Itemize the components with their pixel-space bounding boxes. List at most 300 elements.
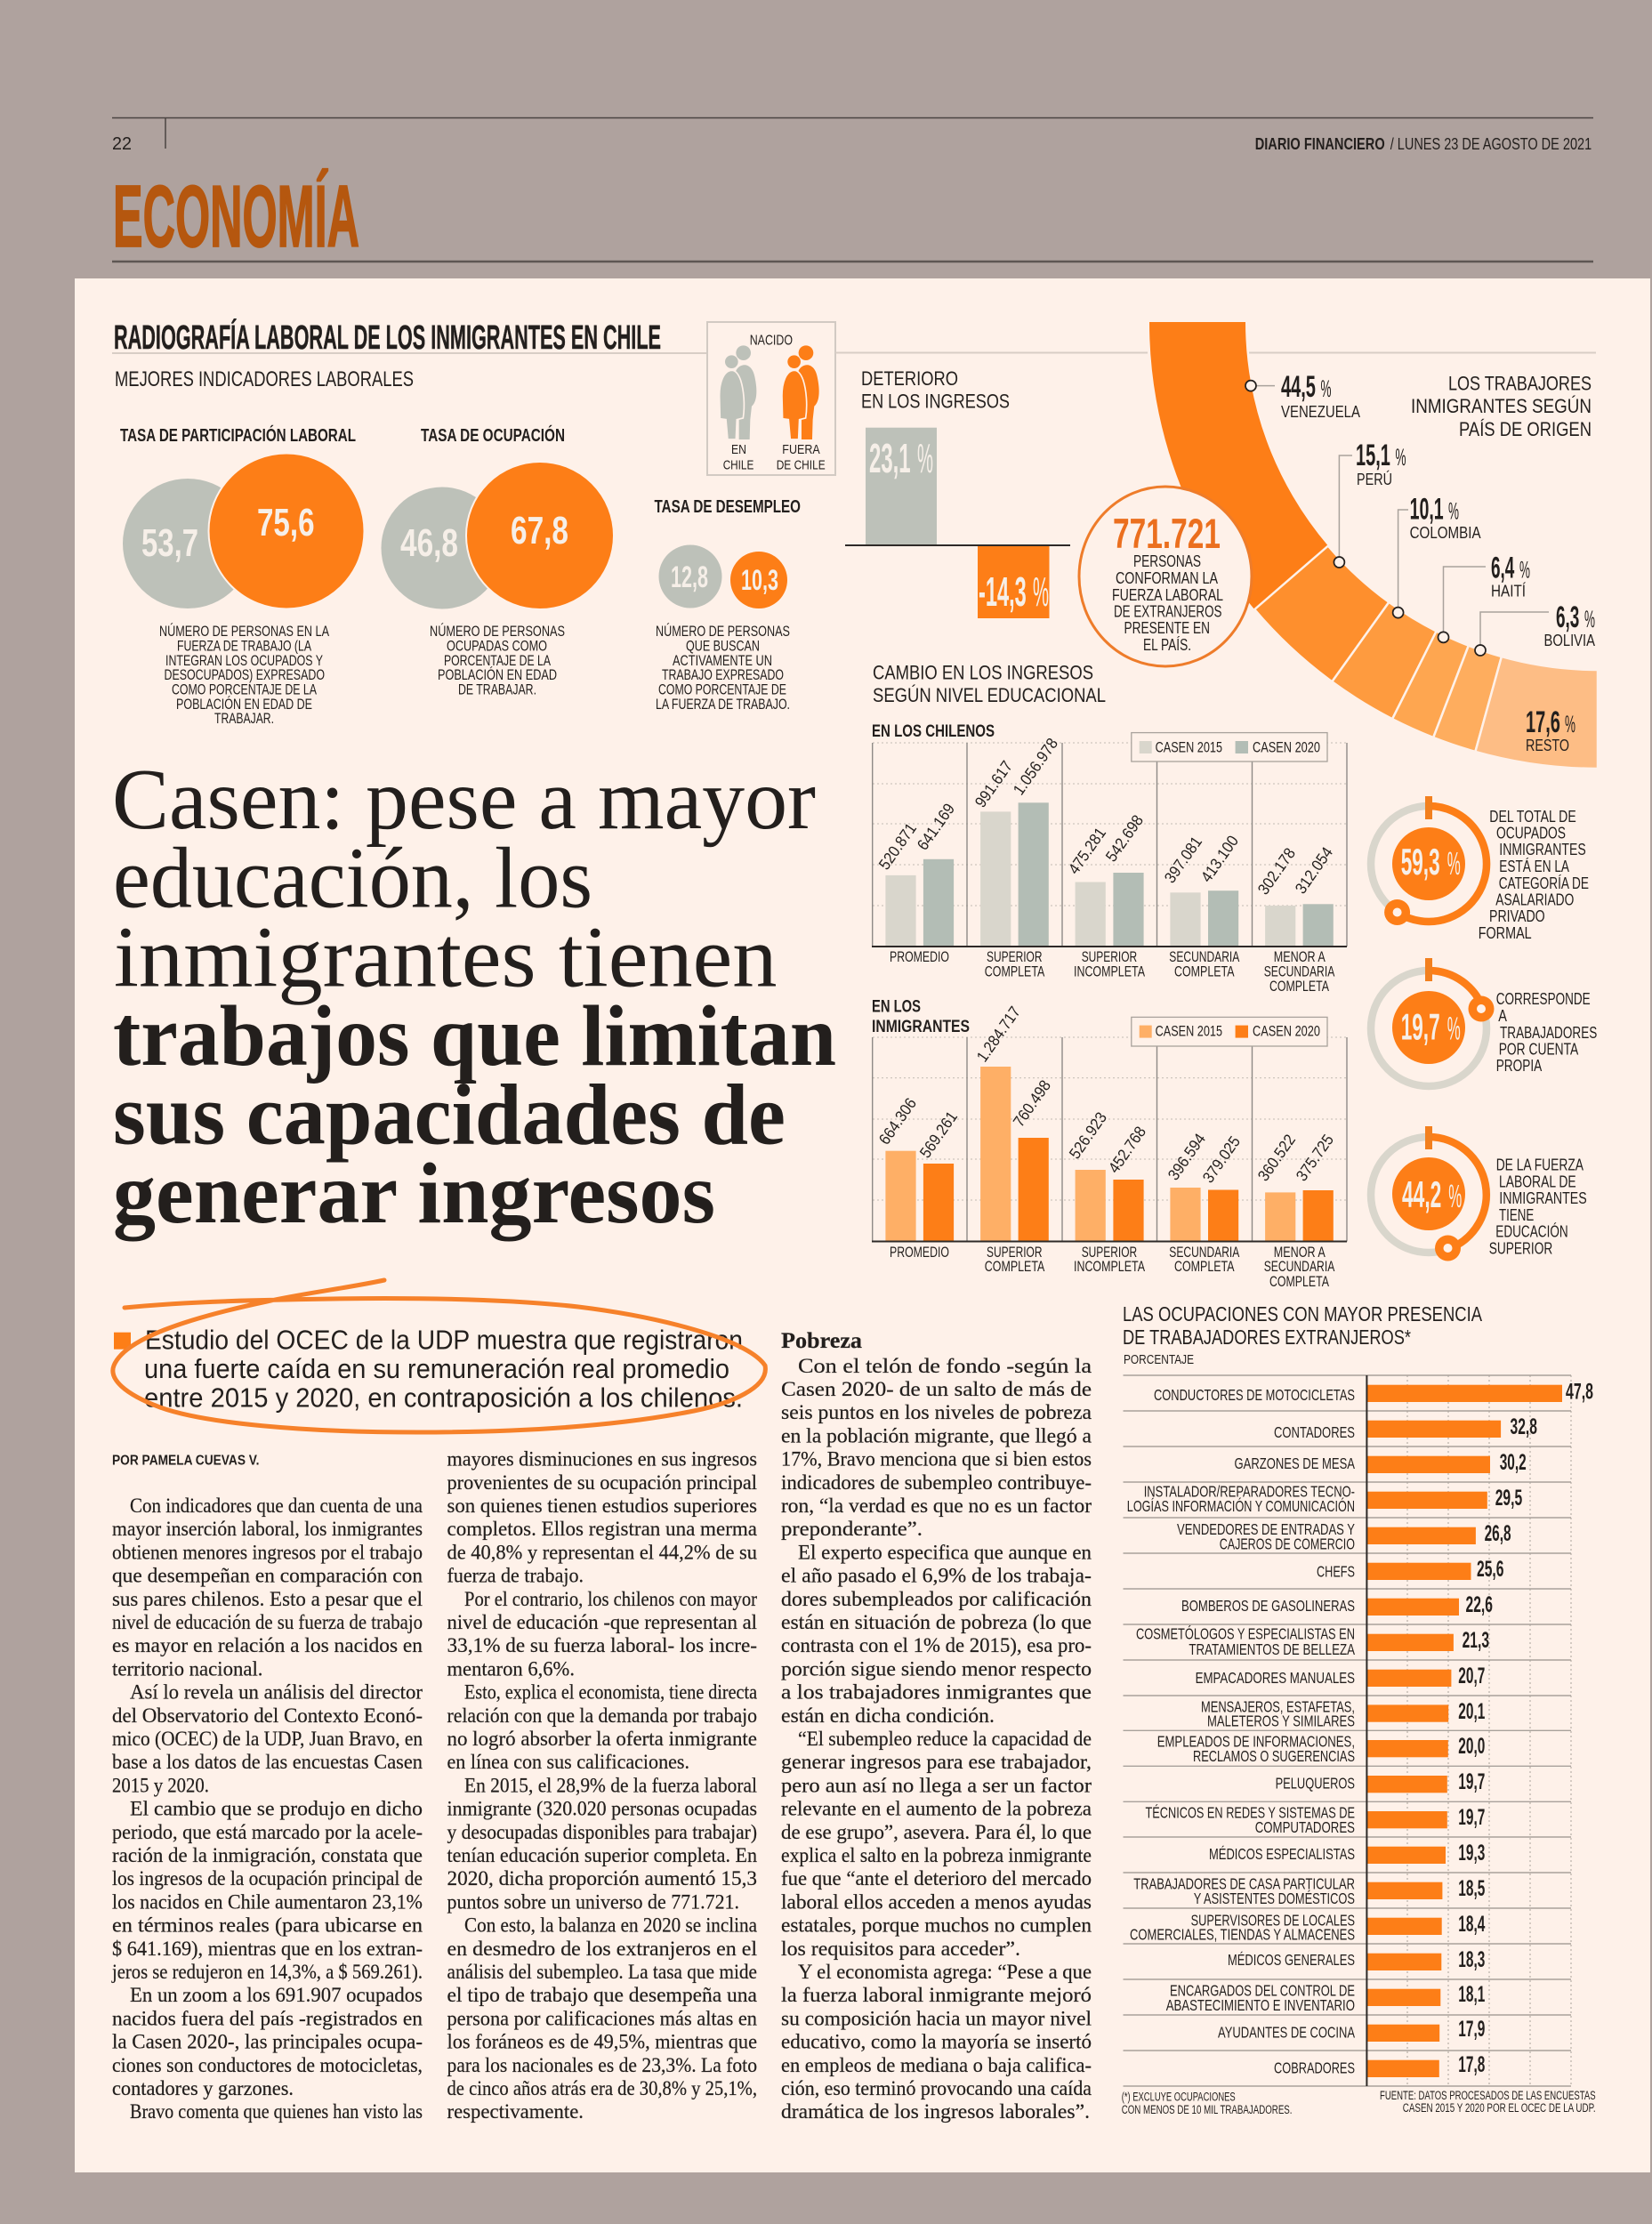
article column 2: mayores disminuciones en sus ingresos (447, 1448, 757, 1471)
article column 3: Pobreza: están en situación de pobreza (lo que (781, 1611, 1092, 1633)
chart category labels: COMPUTADORES (1255, 1818, 1355, 1836)
article column 3: Pobreza: “El subempleo reduce la capacidad de (798, 1728, 1092, 1750)
highlighted summary with hand-drawn circle (113, 1280, 765, 1432)
panel: tasa de participación laboral: FUERZA DE TRABAJO (LA (177, 639, 311, 655)
icon: pair of people, orange (782, 345, 819, 439)
chart value labels: 475.281 (1065, 824, 1109, 877)
chart category labels: MENOR A (1274, 1245, 1326, 1261)
article column 3: Pobreza: Con el telón de fondo -según la (798, 1355, 1092, 1377)
label: Resto (1526, 705, 1575, 754)
chart category labels: PROMEDIO (890, 949, 949, 965)
chart category labels: TRATAMIENTOS DE BELLEZA (1189, 1640, 1355, 1658)
legend: nacido en Chile / fuera de Chile: CHILE (723, 457, 753, 473)
chart category labels: ABASTECIMIENTO E INVENTARIO (1166, 1996, 1355, 2014)
label: Venezuela: 44,5 (1281, 370, 1340, 404)
chart title: PORCENTAJE (1124, 1352, 1194, 1367)
chart value labels: 360.522 (1254, 1131, 1299, 1184)
chart title: DE TRABAJADORES EXTRANJEROS* (1123, 1326, 1411, 1349)
article column 1: mayor inserción laboral, los inmigrantes (112, 1518, 423, 1540)
article column 3: Pobreza: la fuerza laboral inmigrante mejoró (781, 1984, 1092, 2006)
gauge: 19,7% cuenta propia: A (1498, 1007, 1507, 1025)
article column 2: provenientes de su ocupación principal (447, 1471, 757, 1494)
chart value labels: 1.056.978 (1010, 735, 1061, 798)
chart value labels: 26,8 (1485, 1521, 1511, 1546)
article column 1: periodo, que está marcado por la acele- (112, 1821, 423, 1843)
legend: nacido en Chile / fuera de Chile: EN (731, 442, 746, 457)
chart value labels: 20,0 (1458, 1734, 1485, 1759)
article column 2: En 2015, el 28,9% de la fuerza laboral (464, 1774, 757, 1796)
chart category labels: CAJEROS DE COMERCIO (1220, 1535, 1355, 1553)
heading: cambio en los ingresos (873, 662, 1106, 706)
page header: / LUNES 23 DE AGOSTO DE 2021 (1390, 135, 1592, 153)
panel: tasa de ocupación: 46,8 (400, 521, 458, 565)
gauge: 19,7% cuenta propia: CORRESPONDE (1496, 990, 1591, 1008)
gauge: 44,2% educación superior: SUPERIOR (1489, 1240, 1552, 1258)
article column 3: Pobreza: explica el salto en la pobreza inmigrante (781, 1844, 1092, 1866)
chart value labels: 22,6 (1466, 1592, 1493, 1617)
panel: deterioro en los ingresos: % (1033, 568, 1049, 615)
chart title: PAÍS DE ORIGEN (1459, 418, 1592, 440)
callout: 771.721 personas: PERSONAS (1133, 552, 1201, 570)
label: Colombia: COLOMBIA (1410, 523, 1481, 542)
panel: tasa de ocupación: NÚMERO DE PERSONAS (430, 623, 565, 640)
article column 1: nacidos fuera del país -registrados en (112, 2007, 423, 2029)
chart legend: CASEN 2015 (1156, 740, 1222, 756)
article column 2: respectivamente. (447, 2100, 584, 2123)
page header: 22 (112, 134, 132, 154)
article column 2: 33,1% de su fuerza laboral- los incre- (447, 1634, 757, 1656)
panel: tasa de desempleo: LA FUERZA DE TRABAJO. (656, 697, 790, 713)
article column 3: Pobreza: los requisitos para acceder”. (781, 1938, 1020, 1960)
divider continuation (835, 352, 1596, 354)
article column 1: los ingresos de la ocupación principal de (112, 1867, 423, 1890)
chart value labels: 520.871 (875, 819, 920, 873)
label: Colombia: % (1448, 498, 1459, 525)
chart value labels: 542.698 (1102, 811, 1147, 865)
panel: deterioro en los ingresos: -14,3 (979, 568, 1072, 615)
chart value labels: 32,8 (1511, 1414, 1537, 1439)
label: Venezuela (1245, 370, 1361, 421)
label: Colombia: 10,1 (1410, 493, 1469, 527)
gauge: 19,7% cuenta propia: % (1447, 1011, 1461, 1047)
panel: deterioro en los ingresos: 23,1 (869, 435, 949, 481)
gauge: 59,3% asalariado privado formal: 59,3 (1401, 841, 1473, 882)
chart value labels (1458, 1379, 1593, 2077)
callout: 771.721 personas: PRESENTE EN (1124, 618, 1210, 637)
gauge: 44,2% educación superior: INMIGRANTES (1499, 1189, 1587, 1207)
gauge: 44,2% educación superior: TIENE (1499, 1206, 1534, 1224)
article column 2: análisis del subempleo. La tasa que mide (447, 1961, 757, 1983)
label: Haití: HAITÍ (1491, 582, 1527, 600)
chart category labels: MÉDICOS GENERALES (1228, 1951, 1355, 1969)
chart category labels: SUPERIOR (987, 1245, 1043, 1261)
chart value labels: 413.100 (1197, 832, 1242, 885)
chart title (1123, 1302, 1483, 1367)
panel: tasa de participación laboral: 75,6 (257, 501, 315, 544)
label: Resto: RESTO (1526, 736, 1569, 754)
panel: tasa de desempleo (655, 497, 801, 713)
chart value labels: 18,1 (1458, 1982, 1485, 2007)
chart category labels: SUPERIOR (987, 949, 1043, 965)
article column 3: Pobreza: ron, “la verdad es que no es un factor (781, 1495, 1092, 1517)
label: Bolivia (1475, 600, 1596, 656)
article column 3: Pobreza: estatales, porque muchos no cumplen (781, 1914, 1092, 1937)
chart category labels: CHEFS (1317, 1563, 1355, 1581)
chart value labels: 30,2 (1500, 1450, 1527, 1475)
chart category labels: SECUNDARIA (1264, 964, 1334, 980)
gauge: 59,3% asalariado privado formal (1371, 796, 1589, 942)
legend: nacido en Chile / fuera de Chile: DE CHILE (777, 457, 826, 473)
headline: trabajos que limitan (113, 988, 836, 1084)
chart title (1411, 373, 1592, 440)
article column 3: Pobreza: generar ingresos para ese trabajador, (781, 1751, 1092, 1773)
chart category labels: SUPERIOR (1082, 949, 1137, 965)
article column 2: 2020, dicha proporción aumentó 15,3 (447, 1867, 757, 1890)
label: Perú (1334, 439, 1406, 568)
article column 1: la Casen 2020-, las principales ocupa- (112, 2031, 423, 2053)
chart category labels: SECUNDARIA (1169, 1245, 1239, 1261)
article column 3: Pobreza: ción, eso terminó provocando una caída (781, 2077, 1092, 2099)
chart value labels: 991.617 (971, 757, 1016, 810)
article column 3: Pobreza (781, 1329, 1092, 2123)
article column 2: tenían educación superior completa. En (447, 1844, 757, 1866)
page header (112, 117, 1593, 262)
article column 2: no logró absorber la oferta inmigrante (447, 1728, 757, 1750)
chart category labels: SECUNDARIA (1264, 1259, 1334, 1275)
label: Bolivia: BOLIVIA (1544, 631, 1596, 649)
chart legend: CASEN 2020 (1253, 1023, 1320, 1039)
label: Venezuela: VENEZUELA (1281, 402, 1361, 421)
article column 3: Pobreza: a los trabajadores inmigrantes que (781, 1681, 1092, 1704)
article column 3: Pobreza: fue que “ante el deterioro del mercado (781, 1867, 1092, 1890)
article column 1: es mayor en relación a los nacidos en (112, 1634, 423, 1656)
callout: 771.721 personas (1079, 487, 1252, 666)
article column 2: y desocupadas disponibles para trabajar) (447, 1821, 757, 1843)
chart category labels: RECLAMOS O SUGERENCIAS (1193, 1747, 1355, 1765)
panel: tasa de ocupación: OCUPADAS COMO (447, 639, 547, 655)
chart bars (1366, 1385, 1562, 2077)
chart value labels: 396.594 (1164, 1130, 1209, 1183)
gauge: 59,3% asalariado privado formal: PRIVADO (1489, 907, 1545, 925)
article column 1: base a los datos de las encuestas Casen (112, 1751, 423, 1773)
gauge: 44,2% educación superior: EDUCACIÓN (1495, 1222, 1568, 1241)
article column 1: ración de la inmigración, constata que (112, 1844, 423, 1866)
gauge: 44,2% educación superior: % (1448, 1178, 1462, 1214)
chart value labels: 18,5 (1458, 1876, 1485, 1901)
article column 2: relación con que la demanda por trabajo (447, 1704, 757, 1727)
article column 3: Pobreza: de ese grupo”, asevera. Para él, lo que (781, 1821, 1092, 1843)
gauge: 19,7% cuenta propia: 19,7 (1401, 1006, 1473, 1048)
chart category labels (890, 949, 1334, 995)
article column 2: el tipo de trabajo que desempeña una (447, 1984, 757, 2006)
article column 2: en línea con sus calificaciones. (447, 1751, 689, 1773)
article column 3: Pobreza: contrasta con el 1% de 2015), esa pro- (781, 1634, 1092, 1656)
chart value labels: 452.768 (1105, 1123, 1149, 1176)
chart value labels: 375.725 (1293, 1131, 1337, 1184)
gauge: 59,3% asalariado privado formal: ESTÁ EN LA (1499, 858, 1569, 875)
article column 1: nivel de educación de su fuerza de trabajo (112, 1611, 423, 1633)
gauge: 19,7% cuenta propia: TRABAJADORES (1500, 1024, 1597, 1042)
bar chart: en los inmigrantes: INMIGRANTES (872, 1018, 970, 1036)
chart value labels: 19,7 (1458, 1805, 1485, 1830)
chart value labels: 21,3 (1463, 1628, 1489, 1653)
chart: trabajadores inmigrantes según país de origen (1149, 322, 1598, 769)
footnote (1122, 2091, 1292, 2116)
chart category labels: COMERCIALES, TIENDAS Y ALMACENES (1130, 1926, 1355, 1944)
panel: tasa de participación laboral: INTEGRAN LOS OCUPADOS Y (165, 653, 323, 669)
article column 2 (447, 1448, 757, 2123)
article column 3: Pobreza: en empleos de mediana o baja califica- (781, 2054, 1092, 2076)
legend: nacido en Chile / fuera de Chile: FUERA (782, 442, 820, 457)
panel: tasa de desempleo: QUE BUSCAN (686, 639, 760, 655)
chart value labels: 569.261 (916, 1108, 961, 1161)
chart value labels: 17,9 (1458, 2017, 1485, 2042)
panel: tasa de participación laboral: DESOCUPADOS) EXPRESADO (164, 667, 325, 683)
chart category labels: INCOMPLETA (1074, 1259, 1145, 1275)
chart legend: CASEN 2015 (1156, 1023, 1222, 1039)
chart legend (1132, 1017, 1327, 1046)
panel: tasa de desempleo: 12,8 (671, 560, 708, 594)
gauge: 59,3% asalariado privado formal: ASALARIADO (1495, 891, 1574, 909)
panel: tasa de ocupación: 67,8 (511, 509, 568, 552)
article column 2: inmigrante (320.020 personas ocupadas (447, 1798, 757, 1820)
article column 1: contadores y garzones. (112, 2077, 294, 2099)
chart category labels: CONDUCTORES DE MOTOCICLETAS (1154, 1386, 1355, 1404)
article column 2: Con esto, la balanza en 2020 se inclina (464, 1914, 757, 1937)
article column 1: los nacidos en Chile aumentaron 23,1% (112, 1890, 423, 1913)
chart segments (1149, 322, 1598, 769)
label: Bolivia: 6,3 (1556, 600, 1598, 634)
article column 1: territorio nacional. (112, 1657, 263, 1680)
article column 2: de 40,8% y representan el 44,2% de su (447, 1541, 757, 1563)
article column 1: Con indicadores que dan cuenta de una (130, 1495, 423, 1517)
article column 2: de cinco años atrás era de 30,8% y 25,1%, (447, 2077, 757, 2099)
chart category labels: BOMBEROS DE GASOLINERAS (1181, 1597, 1355, 1615)
chart title: LAS OCUPACIONES CON MAYOR PRESENCIA (1123, 1302, 1483, 1326)
article column 3: Pobreza: Y el economista agrega: “Pese a que (798, 1961, 1092, 1983)
chart category labels: TRABAJADORES DE CASA PARTICULAR (1133, 1874, 1355, 1892)
chart category labels: VENDEDORES DE ENTRADAS Y (1177, 1520, 1355, 1538)
chart category labels: MENSAJEROS, ESTAFETAS, (1201, 1697, 1355, 1715)
gauge: 44,2% educación superior: DE LA FUERZA (1496, 1156, 1584, 1174)
chart category labels: MÉDICOS ESPECIALISTAS (1209, 1845, 1355, 1863)
chart category labels: COMPLETA (1174, 1259, 1235, 1275)
article column 1: del Observatorio del Contexto Econó- (112, 1704, 423, 1727)
chart value labels: 1.284.717 (973, 1003, 1024, 1065)
chart category labels: GARZONES DE MESA (1235, 1454, 1355, 1472)
panel: tasa de participación laboral: TRABAJAR. (214, 711, 274, 727)
panel: deterioro en los ingresos: EN LOS INGRESOS (861, 391, 1010, 413)
chart value labels: 379.025 (1199, 1132, 1244, 1186)
label: Colombia (1393, 493, 1481, 618)
article column 3: Pobreza: dores subempleados por calificación (781, 1588, 1092, 1610)
chart category labels: EMPACADORES MANUALES (1196, 1669, 1355, 1687)
chart value labels: 20,1 (1458, 1699, 1485, 1724)
panel: tasa de ocupación: PORCENTAJE DE LA (444, 653, 551, 669)
chart category labels: ENCARGADOS DEL CONTROL DE (1170, 1981, 1355, 1999)
chart category labels: TÉCNICOS EN REDES Y SISTEMAS DE (1146, 1803, 1355, 1821)
chart category labels: EMPLEADOS DE INFORMACIONES, (1157, 1732, 1355, 1750)
panel: tasa de participación laboral: 53,7 (141, 521, 198, 565)
chart category labels (1127, 1386, 1355, 2077)
chart value labels: 664.306 (875, 1094, 920, 1148)
chart value labels: 20,7 (1458, 1664, 1485, 1688)
article column 3: Pobreza: El experto especifica que aunque en (798, 1541, 1092, 1563)
gauge: 19,7% cuenta propia: PROPIA (1496, 1057, 1542, 1075)
article column 2: completos. Ellos registran una merma (447, 1518, 757, 1540)
article column 2: fuerza de trabajo. (447, 1565, 584, 1587)
panel: tasa de desempleo: TRABAJO EXPRESADO (662, 667, 784, 683)
article column 1: sus pares chilenos. Esto a pesar que el (112, 1588, 423, 1610)
chart category labels: COSMETÓLOGOS Y ESPECIALISTAS EN (1136, 1624, 1355, 1643)
article column 2: nivel de educación -que representan al (447, 1611, 757, 1633)
chart bars (885, 802, 1334, 947)
chart value labels: 526.923 (1066, 1108, 1110, 1162)
label: Haití: 6,4 (1491, 551, 1533, 584)
chart category labels: INSTALADOR/REPARADORES TECNO- (1144, 1483, 1355, 1501)
legend: nacido en Chile / fuera de Chile: NACIDO (750, 333, 793, 349)
legend: nacido en Chile / fuera de Chile (707, 322, 835, 475)
headline: Casen: pese a mayor (112, 752, 816, 848)
article column 3: Pobreza: preponderante”. (781, 1518, 923, 1540)
chart value labels (875, 735, 1336, 898)
gauge: 59,3% asalariado privado formal: CATEGORÍA DE (1499, 874, 1589, 892)
panel: tasa de desempleo: TASA DE DESEMPLEO (655, 497, 801, 517)
chart title: INMIGRANTES SEGÚN (1411, 395, 1592, 417)
chart category labels: SECUNDARIA (1169, 949, 1239, 965)
label: Perú: PERÚ (1357, 470, 1392, 488)
article column 2: en desmedro de los extranjeros en el (447, 1938, 757, 1960)
chart category labels: COMPLETA (985, 1259, 1044, 1275)
byline: POR PAMELA CUEVAS V. (112, 1454, 260, 1469)
article column 2: los foráneos es de 49,5%, mientras que (447, 2031, 757, 2053)
gauge: 44,2% educación superior: LABORAL DE (1499, 1173, 1576, 1191)
chart value labels: 29,5 (1495, 1486, 1522, 1511)
article column 1: en términos reales (para ubicarse en (112, 1914, 423, 1937)
panel: tasa de desempleo: NÚMERO DE PERSONAS (656, 623, 790, 640)
article column 3: Pobreza: Pobreza (781, 1329, 863, 1353)
chart value labels: 312.054 (1292, 843, 1336, 897)
bar chart: en los inmigrantes: EN LOS (872, 998, 921, 1016)
panel: deterioro en los ingresos (845, 367, 1070, 618)
chart category labels: INCOMPLETA (1074, 964, 1145, 980)
article column 1 (111, 1495, 423, 2123)
headline: educación, los (113, 831, 592, 927)
infographic title: RADIOGRAFÍA LABORAL DE LOS INMIGRANTES EN CHILE (114, 318, 661, 357)
article column 3: Pobreza: porción sigue siendo menor respecto (781, 1657, 1092, 1680)
callout: 771.721 personas: CONFORMAN LA (1116, 568, 1219, 587)
label: Perú: 15,1 (1356, 439, 1414, 472)
chart: trabajadores inmigrantes según país de origen: % (1565, 711, 1575, 737)
headline: sus capacidades de (113, 1068, 786, 1164)
chart category labels (890, 1245, 1334, 1290)
article column 2: puntos sobre un universo de 771.721. (447, 1890, 739, 1913)
article column 2: Esto, explica el economista, tiene directa (464, 1681, 757, 1704)
chart value labels: 17,8 (1458, 2052, 1485, 2077)
panel: tasa de desempleo: 10,3 (741, 564, 778, 596)
bar chart: en los chilenos (872, 722, 1347, 995)
article column 2: para los nacionales es de 23,3%. La foto (447, 2054, 757, 2076)
article column 3: Pobreza: están en dicha condición. (781, 1704, 995, 1727)
article column 2: persona por calificaciones más altas en (447, 2007, 757, 2029)
article column 1: 2015 y 2020. (112, 1774, 209, 1796)
panel: tasa de participación laboral (120, 424, 365, 727)
label: Bolivia: % (1584, 606, 1595, 633)
headline (112, 752, 836, 1242)
chart category labels: SUPERVISORES DE LOCALES (1191, 1911, 1355, 1929)
chart category labels: MALETEROS Y SIMILARES (1207, 1712, 1355, 1730)
highlighted summary with hand-drawn circle: Estudio del OCEC de la UDP muestra que registraron (145, 1325, 743, 1356)
bar chart: en los inmigrantes (872, 998, 1347, 1290)
panel: tasa de desempleo: ACTIVAMENTE UN (673, 653, 772, 669)
article column 2: Por el contrario, los chilenos con mayor (464, 1588, 757, 1610)
chart value labels: 18,3 (1458, 1947, 1485, 1972)
panel: tasa de participación laboral: NÚMERO DE PERSONAS EN LA (159, 623, 329, 640)
chart: ocupaciones con mayor presencia de trabajadores extranjeros (1123, 1302, 1593, 2086)
footnote: CON MENOS DE 10 MIL TRABAJADORES. (1122, 2103, 1292, 2116)
callout: 771.721 personas: FUERZA LABORAL (1112, 585, 1223, 604)
chart value labels: 47,8 (1566, 1379, 1593, 1404)
panel: tasa de desempleo: COMO PORCENTAJE DE (658, 681, 786, 697)
chart value labels: 19,3 (1458, 1841, 1485, 1865)
article column 3: Pobreza: laboral ellos acceden a menos ayudas (781, 1890, 1092, 1913)
callout: 771.721 personas: EL PAÍS. (1143, 635, 1191, 654)
callout: 771.721 personas: DE EXTRANJEROS (1114, 601, 1222, 621)
chart category labels: MENOR A (1274, 949, 1326, 965)
panel: tasa de ocupación: TASA DE OCUPACIÓN (421, 424, 565, 446)
chart value labels: 397.081 (1161, 833, 1205, 886)
chart category labels: COMPLETA (1269, 979, 1329, 995)
gauge: 59,3% asalariado privado formal: DEL TOTAL DE (1489, 808, 1576, 826)
chart category labels: SUPERIOR (1082, 1245, 1137, 1261)
chart bars (885, 1067, 1334, 1242)
chart value labels: 18,4 (1458, 1912, 1485, 1937)
article column 1: obtienen menores ingresos por el trabajo (112, 1541, 423, 1563)
gauge: 19,7% cuenta propia: POR CUENTA (1499, 1040, 1578, 1058)
gauge: 59,3% asalariado privado formal: FORMAL (1479, 924, 1532, 942)
chart category labels: CONTADORES (1274, 1423, 1355, 1441)
chart category labels: LOGÍAS INFORMACIÓN Y COMUNICACIÓN (1127, 1496, 1355, 1515)
article column 3: Pobreza: indicadores de subempleo contribuye- (781, 1471, 1092, 1494)
panel: tasa de participación laboral: COMO PORCENTAJE DE LA (172, 681, 317, 697)
gauge: 44,2% educación superior (1371, 1126, 1587, 1261)
chart value labels: 760.498 (1010, 1076, 1054, 1130)
label: Resto: 17,6 (1526, 705, 1584, 739)
chart value labels: 19,7 (1458, 1769, 1485, 1794)
source note (1380, 2089, 1596, 2115)
article column 2: mentaron 6,6%. (447, 1657, 575, 1680)
chart value labels: 641.169 (914, 800, 958, 853)
article column 1: Así lo revela un análisis del director (130, 1681, 423, 1704)
highlighted summary with hand-drawn circle: entre 2015 y 2020, en contraposición a los chilenos. (144, 1382, 743, 1414)
panel: tasa de ocupación: DE TRABAJAR. (458, 681, 536, 697)
article column 1: mico (OCEC) de la UDP, Juan Bravo, en (112, 1728, 423, 1750)
article column 3: Pobreza: relevante en el aumento de la pobreza (781, 1798, 1092, 1820)
article column 1: En un zoom a los 691.907 ocupados (130, 1984, 423, 2006)
article column 3: Pobreza: seis puntos en los niveles de pobreza (781, 1401, 1092, 1423)
footnote: (*) EXCLUYE OCUPACIONES (1122, 2091, 1236, 2104)
chart value labels: 302.178 (1254, 844, 1299, 898)
article column 3: Pobreza: educativo, como la mayoría se insertó (781, 2031, 1092, 2053)
chart category labels: PROMEDIO (890, 1245, 949, 1261)
icon: pair of people, gray (720, 345, 756, 439)
article column 3: Pobreza: dramática de los ingresos laborales”. (781, 2100, 1090, 2123)
gauge: 19,7% cuenta propia (1371, 958, 1597, 1086)
article column 1: que desempeñan en comparación con (112, 1565, 423, 1587)
article column 1: $ 641.169), mientras que en los extran- (112, 1938, 423, 1960)
article column 3: Pobreza: pero aun así no llega a ser un factor (781, 1774, 1092, 1796)
panel: tasa de ocupación (381, 424, 614, 697)
